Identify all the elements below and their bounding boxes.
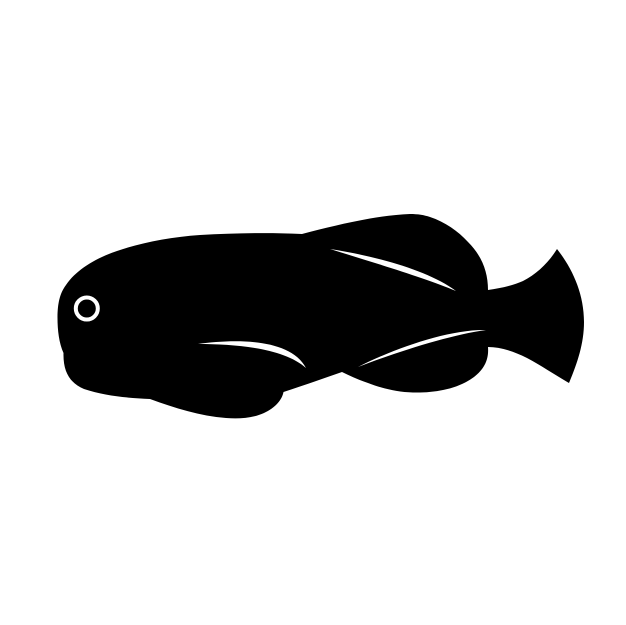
pectoral fin highlight (198, 341, 306, 368)
lower rear fin highlight (358, 330, 486, 367)
upper fin highlight (330, 249, 456, 291)
eye (76, 298, 98, 320)
fish body (58, 214, 584, 418)
